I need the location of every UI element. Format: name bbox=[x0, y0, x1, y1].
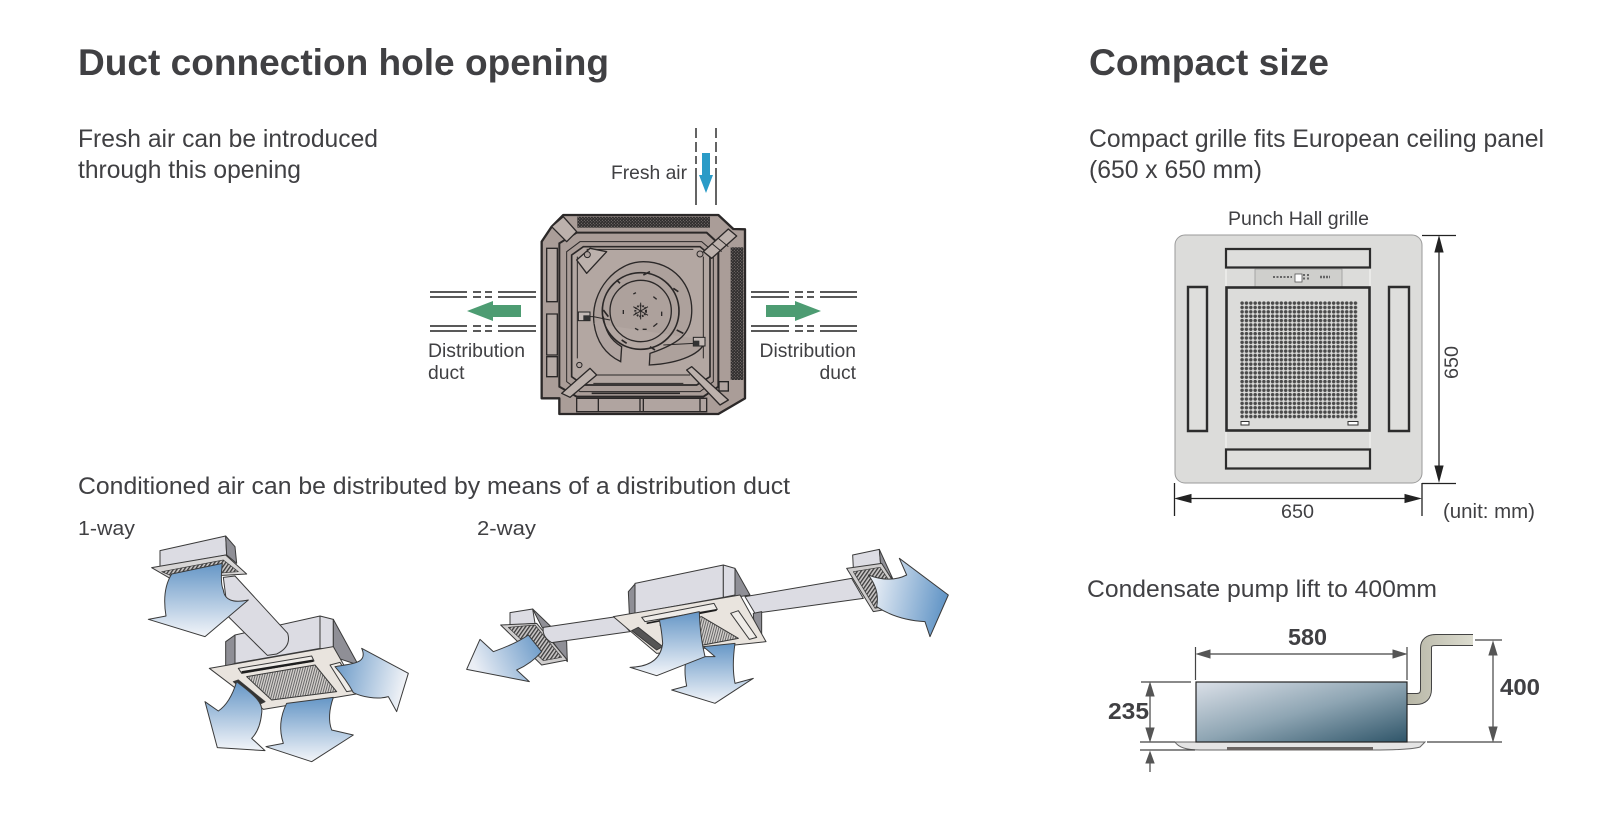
fresh air duct with arrow and label: Fresh air bbox=[611, 163, 688, 184]
left outlet arrow bbox=[467, 635, 542, 682]
diagram: condensate pump side view bbox=[1108, 624, 1540, 772]
left duct bbox=[543, 617, 630, 643]
cassette unit top view bbox=[542, 215, 745, 414]
left distribution duct with arrow and label bbox=[428, 292, 536, 384]
right distribution duct with arrow and label: duct bbox=[820, 363, 857, 384]
perforation dots bbox=[1240, 301, 1358, 419]
lift dimension 400: 400 bbox=[1500, 674, 1540, 700]
width dimension 580 bbox=[1196, 624, 1407, 680]
main cassette body bbox=[226, 616, 358, 667]
outlet arrow lower-centre bbox=[266, 697, 353, 762]
dimension: panel height 650: 650 bbox=[1441, 346, 1463, 379]
outlet arrow lower-left bbox=[205, 682, 265, 751]
right grille bbox=[847, 549, 893, 612]
outlet arrow right bbox=[335, 648, 408, 712]
dimension: panel width 650: 650 bbox=[1281, 501, 1314, 523]
dimension: panel width 650 bbox=[1174, 483, 1422, 523]
height dimension 235: 235 bbox=[1108, 698, 1149, 724]
corner brackets bbox=[552, 217, 737, 405]
panel body bbox=[1175, 235, 1422, 483]
central cassette body bbox=[628, 565, 762, 642]
label: punch hall grille: Punch Hall grille bbox=[1228, 208, 1369, 230]
label: 1-way: 1-way bbox=[78, 517, 136, 540]
text block: compact grille: Compact grille fits European ceiling panel bbox=[1089, 126, 1544, 153]
fresh air duct with arrow and label bbox=[611, 128, 716, 205]
unit box bbox=[1196, 682, 1407, 742]
text block: fresh air intro bbox=[78, 126, 378, 184]
heading: duct connection hole opening: Duct connection hole opening bbox=[78, 42, 609, 83]
text block: conditioned air: Conditioned air can be distributed by means of a distribution duct bbox=[78, 473, 790, 500]
ceiling panel side bbox=[1175, 742, 1425, 750]
left grille bbox=[501, 609, 567, 665]
text block: compact grille: (650 x 650 mm) bbox=[1089, 157, 1262, 184]
corner lamps bbox=[1241, 422, 1358, 425]
text block: fresh air intro: through this opening bbox=[78, 157, 301, 184]
slot: bottom bbox=[1226, 450, 1370, 468]
height dimension 235 bbox=[1108, 682, 1195, 772]
text block: fresh air intro: Fresh air can be introduced bbox=[78, 126, 378, 153]
heading: compact size: Compact size bbox=[1089, 42, 1329, 83]
diagram: punch hall grille panel bbox=[1175, 235, 1422, 483]
front outlet arrow bbox=[630, 612, 705, 676]
note: unit mm: (unit: mm) bbox=[1443, 501, 1535, 523]
label: 2-way: 2-way bbox=[477, 517, 537, 540]
dimension: panel height 650 bbox=[1422, 236, 1463, 484]
central panel bbox=[613, 595, 766, 653]
text block: condensate pump: Condensate pump lift to 400mm bbox=[1087, 576, 1437, 603]
illustration: 1-way duct installation bbox=[148, 536, 408, 762]
right duct bbox=[745, 578, 863, 613]
lift dimension 400 bbox=[1427, 640, 1540, 742]
illustration: 2-way duct installation bbox=[467, 549, 948, 703]
right distribution duct with arrow and label bbox=[751, 292, 857, 384]
slot: top bbox=[1226, 249, 1370, 268]
width dimension 580: 580 bbox=[1288, 624, 1327, 650]
slot: right bbox=[1389, 287, 1409, 431]
connecting duct bbox=[223, 576, 289, 655]
display strip bbox=[1255, 269, 1342, 287]
ceiling panel bbox=[209, 647, 360, 709]
left distribution duct with arrow and label: Distribution bbox=[428, 341, 525, 362]
lower outlet arrow bbox=[672, 643, 753, 703]
outlet arrow 1 bbox=[148, 563, 248, 637]
centre grille bbox=[1226, 288, 1370, 430]
remote grille box bbox=[152, 536, 247, 578]
right outlet arrow bbox=[868, 558, 948, 637]
right distribution duct with arrow and label: Distribution bbox=[760, 341, 856, 362]
left distribution duct with arrow and label: duct bbox=[428, 363, 465, 384]
diagram: cassette unit with duct openings bbox=[428, 128, 857, 414]
text block: compact grille bbox=[1089, 126, 1544, 184]
drain pipe bbox=[1407, 640, 1473, 699]
slot: left bbox=[1188, 287, 1207, 431]
centrifugal fan bbox=[578, 262, 705, 365]
